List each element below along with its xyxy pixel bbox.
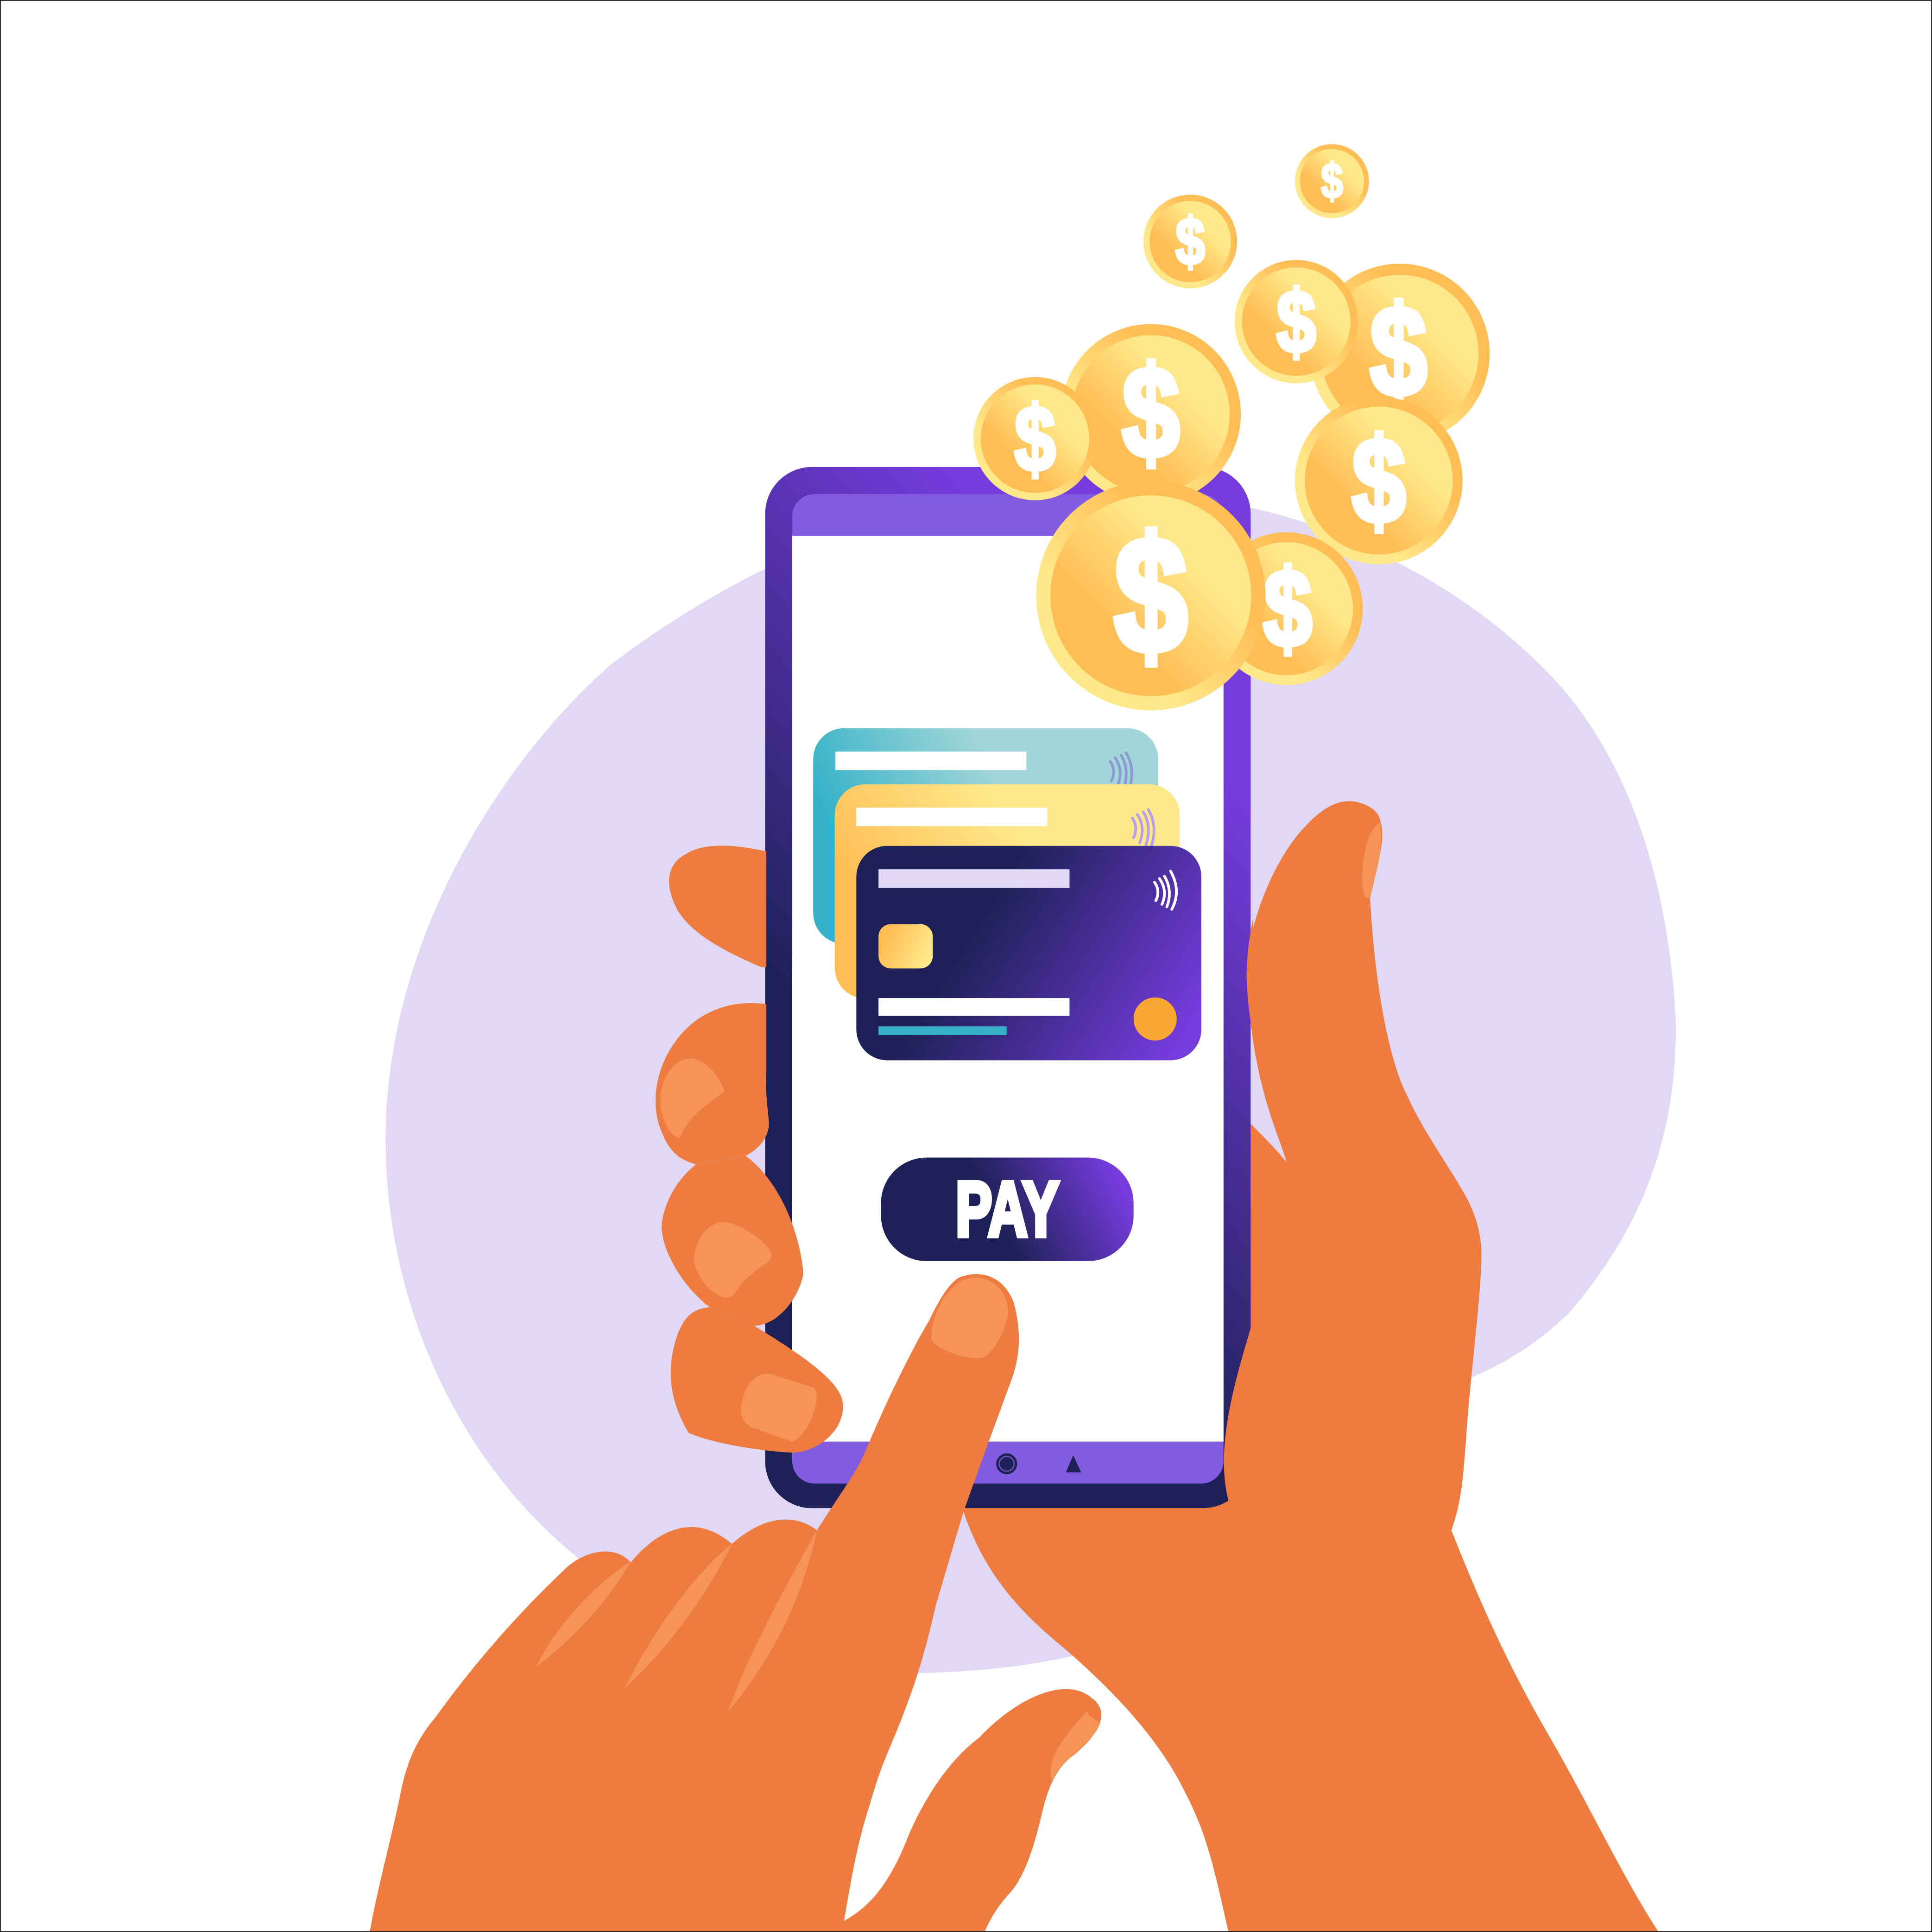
teal card	[813, 728, 1158, 944]
screen bars	[792, 494, 1224, 1484]
right hand holding phone (behind phone)	[964, 801, 1659, 1932]
NFC icon teal card	[1110, 753, 1132, 791]
index nail	[931, 1278, 1008, 1358]
teal bar	[878, 1026, 1007, 1035]
coin 6: $	[1352, 413, 1406, 549]
coin 7	[1210, 532, 1363, 685]
orange dot	[1134, 998, 1177, 1041]
coin 5	[1235, 260, 1358, 383]
coin 3: $	[1015, 387, 1055, 491]
chip	[878, 924, 933, 968]
back triangle icon	[1066, 1455, 1081, 1472]
NFC icon yellow card	[1132, 809, 1154, 848]
coin 4	[1310, 264, 1490, 443]
right thumb edge over phone	[1247, 918, 1253, 1035]
finger 3	[662, 1156, 803, 1326]
coin 4: $	[1370, 280, 1427, 423]
coin 2: $	[1122, 340, 1180, 485]
phone body	[765, 467, 1250, 1508]
left hand pointing at pay	[370, 1274, 1101, 1932]
finger 4	[671, 1307, 843, 1452]
PAY button: PAY	[955, 1165, 1059, 1252]
coin 1 large	[1036, 481, 1265, 710]
knuckle shade 3	[728, 1530, 817, 1711]
navy credit card	[856, 846, 1201, 1060]
right thumb nail	[1362, 822, 1381, 899]
background lavender blob	[385, 498, 1676, 1673]
yellow card	[835, 784, 1180, 998]
coin 6	[1295, 397, 1463, 564]
knuckle shade 2	[625, 1544, 732, 1688]
nail 3	[694, 1222, 771, 1298]
nail 2	[660, 1058, 725, 1137]
home button icon	[996, 1453, 1017, 1474]
NFC icon	[1155, 871, 1176, 909]
coin 7: $	[1263, 548, 1312, 670]
coin 8	[1143, 195, 1237, 288]
nail 4	[741, 1374, 817, 1442]
knuckle shade 1	[536, 1561, 631, 1667]
thumb nail	[1050, 1711, 1100, 1782]
screen white area	[792, 536, 1224, 1442]
coin 2	[1061, 324, 1241, 504]
left hand fingers gripping phone	[656, 846, 843, 1452]
number bar	[878, 998, 1069, 1016]
smartphone	[765, 467, 1250, 1508]
PAY button	[881, 1158, 1134, 1261]
coin 3	[973, 377, 1097, 500]
coin 5: $	[1276, 272, 1316, 371]
finger 1	[669, 846, 766, 967]
coin 9 small top: $	[1321, 154, 1343, 208]
coin 9 small top	[1295, 144, 1369, 218]
coin 1 large: $	[1114, 504, 1187, 687]
hand shape	[370, 1274, 1101, 1932]
finger 2	[656, 1003, 769, 1164]
right hand front overlap on phone	[1201, 1328, 1282, 1540]
coin 8: $	[1175, 204, 1205, 278]
card name bar	[878, 869, 1069, 888]
